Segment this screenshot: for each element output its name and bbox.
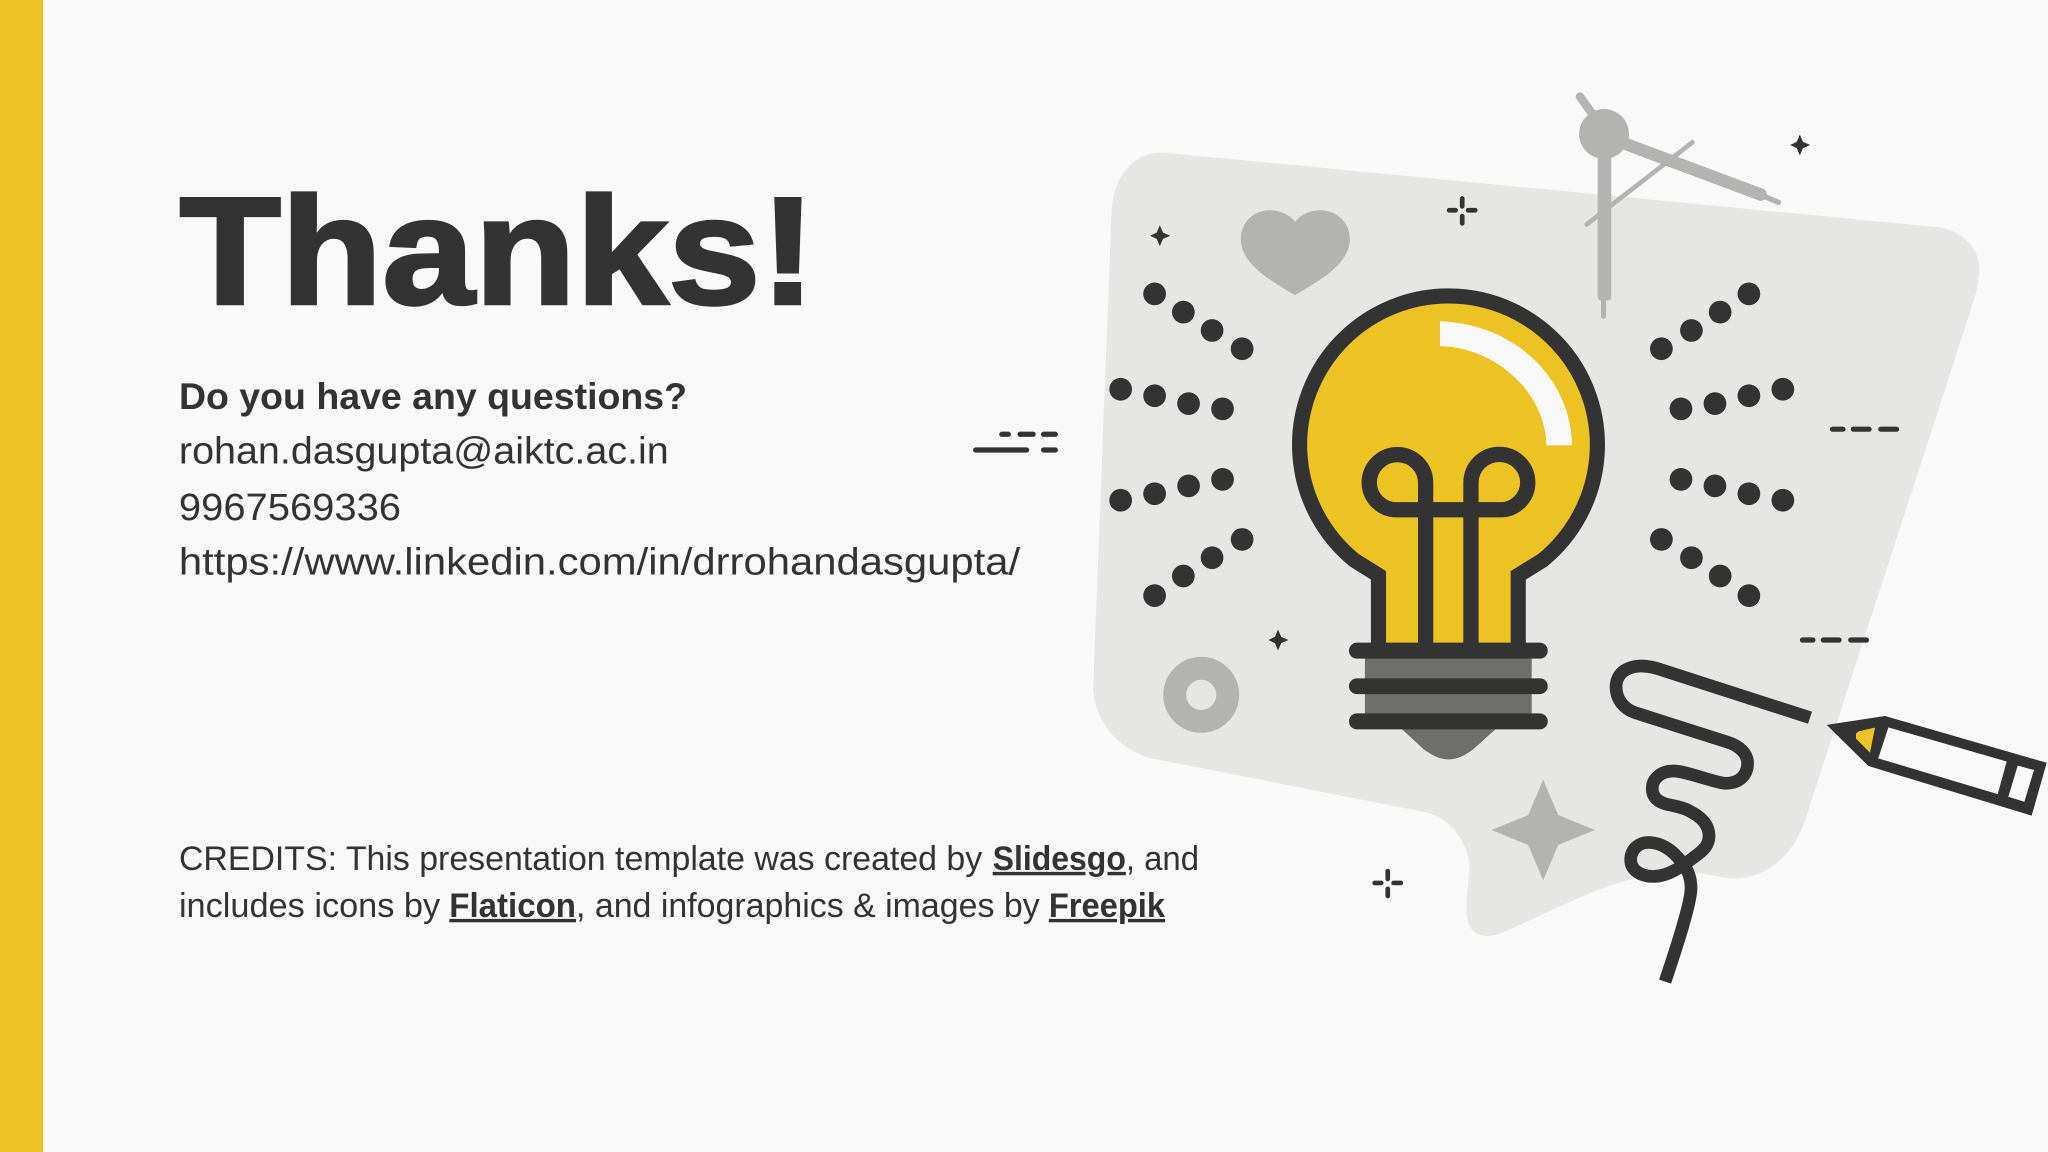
icon: large four-point star (1492, 780, 1595, 880)
squiggle line drawn by pencil (1616, 666, 1810, 982)
dash marks (976, 429, 1896, 640)
credits text block: includes icons by (179, 887, 440, 925)
base tip (1400, 728, 1497, 759)
credits text block (179, 840, 1199, 925)
credits text block: , and (1126, 840, 1199, 878)
phone: 9967569336 (179, 487, 401, 529)
credits text block: Flaticon (449, 887, 576, 925)
light ray dots (1109, 283, 1794, 607)
credits text block: Freepik (1049, 887, 1165, 925)
bulb glass (1300, 296, 1597, 649)
filament (1369, 454, 1528, 649)
email: rohan.dasgupta@aiktc.ac.in (179, 431, 669, 473)
bulb highlight (1440, 321, 1572, 445)
icon: donut ring (1175, 668, 1228, 721)
credits text block: , and infographics & images by (576, 887, 1040, 925)
icon: drafting compass (1579, 97, 1778, 319)
illustration: speech bubble background (1093, 153, 1979, 936)
small sparkles (1150, 135, 1810, 650)
icon: heart (1241, 210, 1350, 295)
screw base (1365, 653, 1532, 718)
linkedin url: https://www.linkedin.com/in/drrohandasgupta/ (179, 542, 1021, 584)
small crosses (1375, 199, 1475, 896)
title: Thanks! (180, 167, 816, 337)
yellow side bar (0, 0, 43, 1152)
credits text block: CREDITS: This presentation template was created by (179, 840, 982, 878)
question heading: Do you have any questions? (179, 375, 687, 417)
credits text block: Slidesgo (993, 840, 1126, 878)
contact text block (179, 375, 1021, 584)
base rings (1349, 643, 1548, 729)
icon: light bulb (1300, 296, 1597, 759)
icon: pencil (1827, 716, 2047, 816)
